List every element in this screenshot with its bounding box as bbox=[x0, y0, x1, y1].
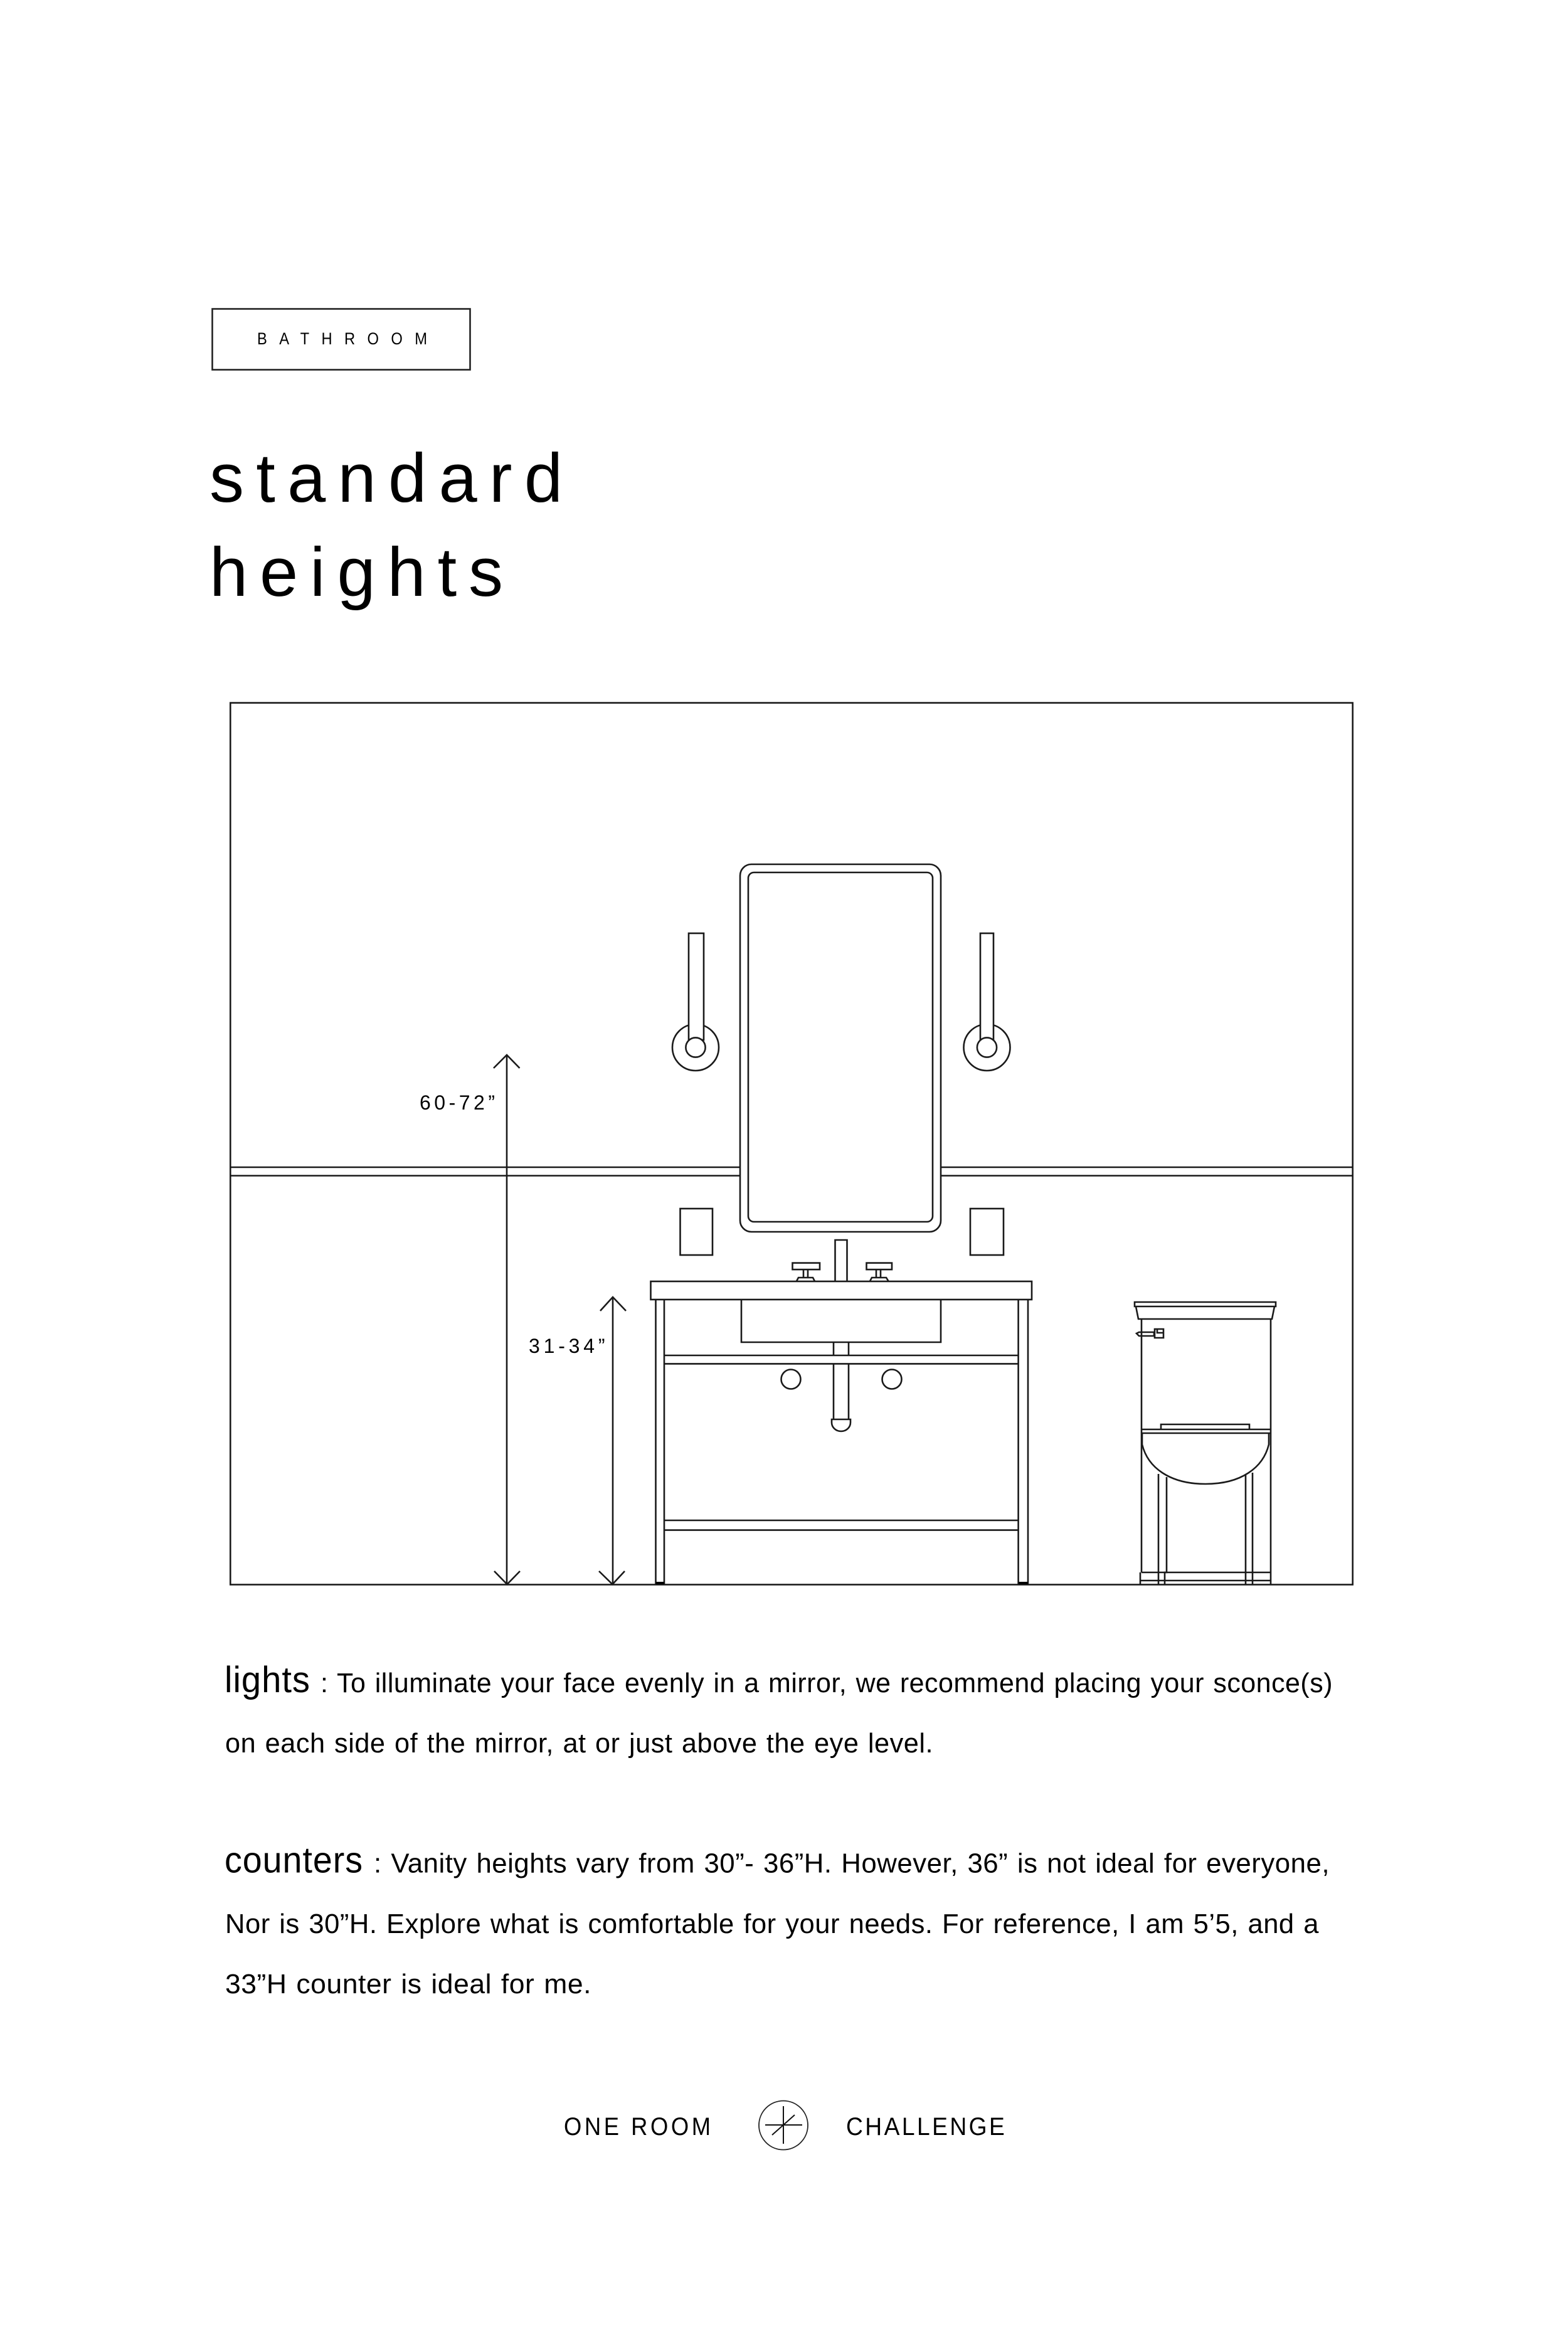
note: counters: 33”H counter is ideal for me. bbox=[225, 1969, 591, 2000]
title: standard bbox=[209, 440, 563, 517]
footer brand: CHALLENGE bbox=[846, 2113, 1007, 2141]
left wall sconce bbox=[672, 933, 719, 1071]
title: heights bbox=[209, 534, 503, 611]
title bbox=[209, 440, 563, 611]
icon: compass star logo bbox=[759, 2101, 808, 2150]
left outlet plate bbox=[680, 1209, 712, 1255]
note: lights: lights bbox=[225, 1660, 310, 1700]
note: lights: on each side of the mirror, at or just above the eye level. bbox=[225, 1728, 933, 1759]
note: counters bbox=[225, 1840, 1330, 2000]
note: counters: counters bbox=[225, 1840, 363, 1880]
mirror bbox=[740, 864, 941, 1232]
category tag: bathroom: BATHROOM bbox=[257, 330, 439, 348]
note: lights bbox=[225, 1660, 1333, 1759]
dimension arrow: 31-34 inches bbox=[529, 1297, 626, 1584]
bathroom elevation diagram bbox=[230, 703, 1353, 1584]
dimension arrow: 60-72 inches bbox=[420, 1055, 520, 1584]
note: counters: Nor is 30”H. Explore what is comfortable for your needs. For reference, I am 5’5, and a bbox=[225, 1909, 1319, 1939]
room frame bbox=[230, 703, 1353, 1584]
right outlet plate bbox=[970, 1209, 1004, 1255]
dimension label: 60-72 inches: 60-72” bbox=[420, 1091, 498, 1114]
dimension label: 31-34 inches: 31-34” bbox=[529, 1335, 608, 1357]
category tag: bathroom bbox=[212, 309, 470, 370]
footer brand: ONE ROOM bbox=[564, 2112, 714, 2141]
vanity console bbox=[651, 1281, 1032, 1584]
note: counters: : Vanity heights vary from 30”- 36”H. However, 36” is not ideal for everyone, bbox=[374, 1848, 1330, 1879]
toilet bbox=[1135, 1302, 1276, 1584]
right wall sconce bbox=[963, 933, 1010, 1071]
footer brand bbox=[564, 2101, 1007, 2150]
note: lights: : To illuminate your face evenly in a mirror, we recommend placing your sconce(s) bbox=[320, 1668, 1333, 1698]
chair rail bbox=[230, 1167, 1353, 1175]
faucet bbox=[793, 1240, 892, 1281]
